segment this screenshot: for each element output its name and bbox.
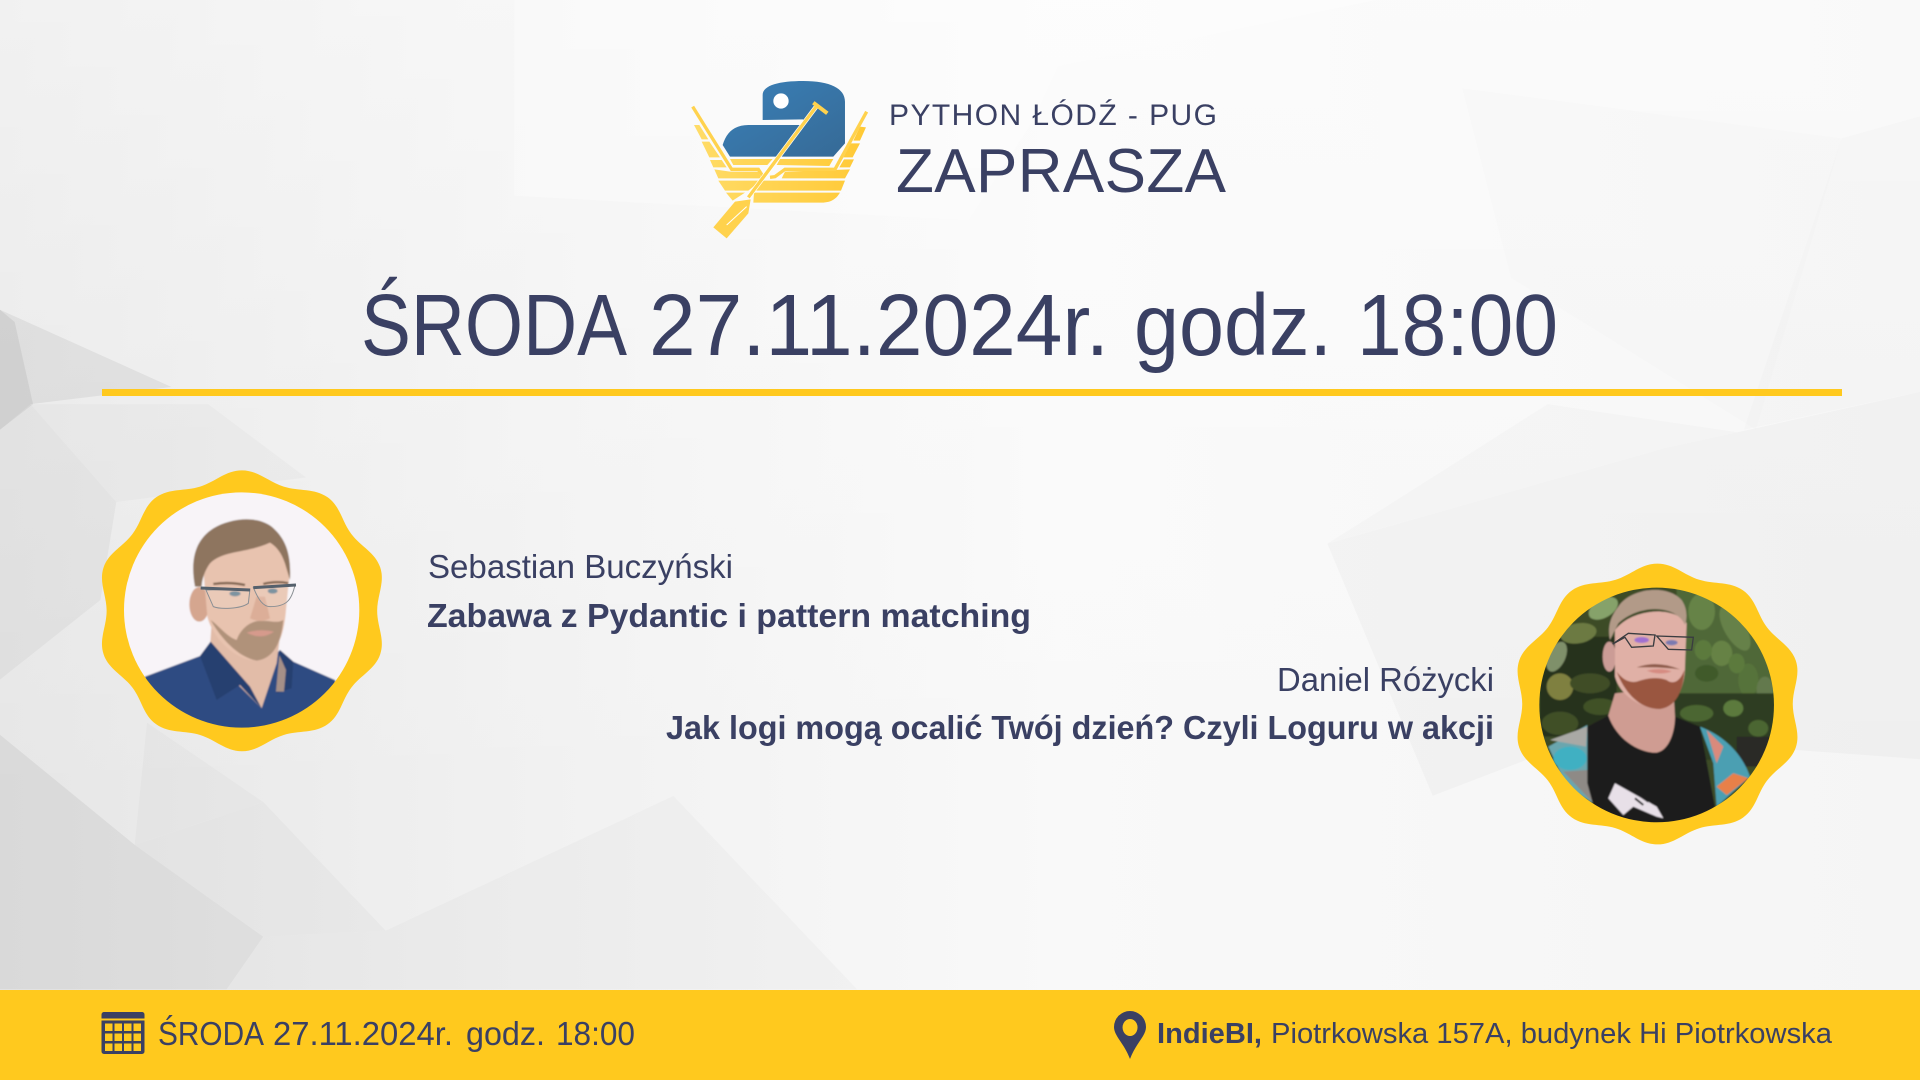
- speaker 2 talk title: Jak logi mogą ocalić Twój dzień? Czyli Loguru w akcji: [666, 709, 1494, 746]
- footer date: ŚRODA: [158, 1014, 264, 1052]
- logo text: organiser name: PYTHON ŁÓDŹ - PUG: [889, 99, 1217, 132]
- speaker 2 portrait badge: [1518, 564, 1797, 844]
- oar: [713, 103, 827, 238]
- footer date: godz.: [466, 1015, 545, 1052]
- boat rims: [693, 107, 867, 177]
- footer date: 18:00: [556, 1015, 635, 1052]
- footer date: 27.11.2024r.: [273, 1015, 453, 1052]
- main date heading: ŚRODA: [361, 277, 627, 374]
- yellow divider: [102, 389, 1842, 396]
- logo: python boat with oar: [693, 81, 867, 238]
- footer venue address: Piotrkowska 157A, budynek Hi Piotrkowska: [1271, 1018, 1833, 1050]
- speaker 1 portrait badge: [102, 470, 382, 751]
- main date heading: 27.11.2024r.: [649, 277, 1109, 374]
- heading: invitation word: ZAPRASZA: [896, 137, 1227, 206]
- speaker 2 name: Daniel Różycki: [1277, 661, 1494, 698]
- main date heading: 18:00: [1357, 277, 1558, 374]
- main date heading: godz.: [1134, 277, 1332, 374]
- boat hull strips: [694, 125, 866, 203]
- icon: calendar: [102, 1012, 144, 1054]
- speaker 1 talk title: Zabawa z Pydantic i pattern matching: [427, 597, 1031, 634]
- footer bar: [0, 990, 1920, 1080]
- snake eye: [773, 93, 789, 109]
- footer venue bold: IndieBI,: [1157, 1018, 1262, 1050]
- speaker 1 name: Sebastian Buczyński: [428, 548, 733, 585]
- python snake head: [723, 81, 845, 157]
- icon: map pin: [1114, 1011, 1146, 1059]
